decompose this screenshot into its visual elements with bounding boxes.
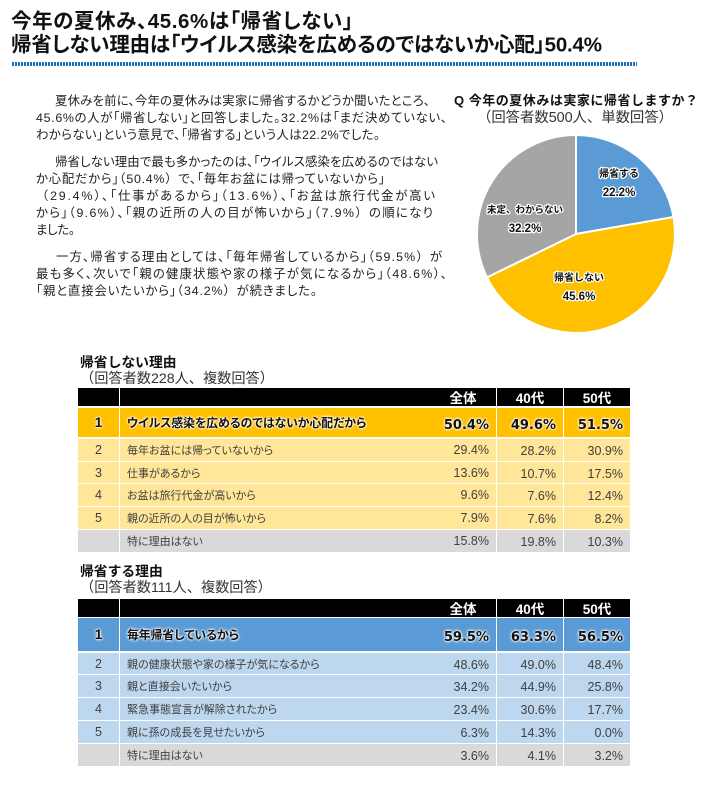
pie chart: 未定、わからない: [487, 204, 563, 216]
pie chart heading: [454, 93, 698, 126]
table: reasons returning: 48.6%: [454, 658, 489, 672]
table: reasons not returning: 5: [95, 511, 102, 525]
table: reasons not returning: 12.4%: [588, 489, 623, 503]
table heading: reasons not returning: （回答者数228人、複数回答）: [80, 371, 274, 387]
table: reasons not returning: 29.4%: [454, 443, 489, 457]
table: reasons not returning: 全体: [450, 391, 476, 406]
table: reasons returning: 44.9%: [521, 680, 556, 694]
text block: summary: ました。: [36, 223, 75, 237]
table: reasons not returning: 15.8%: [454, 534, 489, 548]
table: reasons returning: 30.6%: [521, 703, 556, 717]
table: reasons not returning: 10.7%: [521, 466, 556, 480]
pie chart: 22.2%: [603, 187, 635, 199]
table: reasons not returning: 7.6%: [528, 489, 556, 503]
text block: summary: 帰省しない理由で最も多かったのは、「ウイルス感染を広めるのではない: [55, 154, 438, 169]
table: reasons returning: 50代: [583, 602, 611, 617]
table: reasons returning: 毎年帰省しているから: [127, 628, 239, 642]
text block: summary: （29.4%）、「仕事があるから」（13.6%）、「お盆は旅行代金が高い: [36, 188, 435, 203]
table: reasons not returning: 特に理由はない: [127, 536, 203, 548]
table: reasons not returning: 2: [95, 443, 102, 457]
table: reasons returning: [78, 599, 630, 766]
table: reasons not returning: 13.6%: [454, 466, 489, 480]
pie chart: 32.2%: [509, 223, 541, 235]
table: reasons not returning: ウイルス感染を広めるのではないか心配だから: [127, 416, 366, 430]
table: reasons returning: 5: [95, 725, 102, 739]
pie chart heading: Q 今年の夏休みは実家に帰省しますか？: [454, 93, 698, 108]
table: reasons returning: 56.5%: [578, 630, 623, 644]
table: reasons returning: 緊急事態宣言が解除されたから: [127, 704, 277, 716]
text block: summary: わからない」という意見で、「帰省する」という人は22.2%でした。: [36, 127, 380, 142]
table: reasons returning: 59.5%: [444, 630, 489, 644]
table heading: reasons not returning: [80, 355, 274, 387]
table: reasons returning: 1: [95, 627, 102, 642]
text block: summary: から」（9.6%）、「親の近所の人の目が怖いから」（7.9%）の順になり: [36, 205, 433, 220]
text block: summary: [36, 93, 447, 298]
text block: summary: 「親と直接会いたいから」（34.2%）が続きました。: [36, 283, 317, 298]
table: reasons returning: 48.4%: [588, 658, 623, 672]
pie chart heading: （回答者数500人、単数回答）: [477, 109, 673, 126]
table: reasons not returning: 7.6%: [528, 512, 556, 526]
table: reasons returning: 49.0%: [521, 658, 556, 672]
text block: summary: 45.6%の人が「帰省しない」と回答しました。32.2%は「まだ決めていない、: [36, 110, 447, 125]
table: reasons not returning: 17.5%: [588, 466, 623, 480]
table: reasons not returning: 親の近所の人の目が怖いから: [127, 513, 266, 525]
table: reasons not returning: 40代: [516, 391, 544, 406]
table: reasons not returning: 30.9%: [588, 444, 623, 458]
table: reasons not returning: 9.6%: [460, 488, 489, 502]
table: reasons returning: 3: [95, 679, 102, 693]
table: reasons returning: 全体: [450, 602, 476, 617]
table: reasons returning: 4: [95, 702, 102, 716]
table: reasons not returning: 28.2%: [521, 444, 556, 458]
pie chart: 45.6%: [563, 291, 595, 303]
table: reasons returning: 親と直接会いたいから: [127, 681, 232, 693]
table: reasons returning: 0.0%: [594, 726, 623, 740]
table: reasons not returning: 10.3%: [588, 535, 623, 549]
table heading: reasons returning: （回答者数111人、複数回答）: [80, 580, 272, 596]
table: reasons returning: 14.3%: [521, 726, 556, 740]
table: reasons not returning: 50代: [583, 391, 611, 406]
pie chart: 帰省する: [599, 167, 639, 180]
table heading: reasons not returning: 帰省しない理由: [80, 355, 177, 370]
table: reasons returning: 6.3%: [460, 726, 489, 740]
table: reasons not returning: 仕事があるから: [127, 468, 200, 480]
table: reasons returning: 親に孫の成長を見せたいから: [127, 727, 265, 739]
text block: summary: 一方、帰省する理由としては、「毎年帰省しているから」（59.5%）が: [56, 249, 443, 264]
pie chart: 帰省しない: [554, 271, 604, 284]
table heading: reasons returning: [80, 564, 272, 596]
table: reasons not returning: 毎年お盆には帰っていないから: [127, 445, 273, 457]
table: reasons not returning: 8.2%: [594, 512, 623, 526]
table: reasons returning: 4.1%: [528, 749, 556, 763]
table: reasons returning: 63.3%: [511, 630, 556, 644]
table: reasons not returning: 1: [95, 415, 102, 430]
table: reasons returning: 23.4%: [454, 703, 489, 717]
table: reasons not returning: 51.5%: [578, 418, 623, 432]
table: reasons not returning: 7.9%: [460, 511, 489, 525]
table: reasons returning: 2: [95, 656, 102, 670]
table: reasons not returning: 3: [95, 466, 102, 480]
title: 帰省しない理由は「ウイルス感染を広めるのではないか心配」50.4%: [11, 32, 602, 56]
table: reasons not returning: [78, 388, 630, 552]
title: 今年の夏休み、45.6%は「帰省しない」: [11, 10, 353, 33]
pie chart: [478, 136, 674, 332]
table: reasons returning: 25.8%: [588, 680, 623, 694]
title underline: [12, 62, 637, 66]
table: reasons not returning: 4: [95, 488, 102, 502]
table: reasons returning: 特に理由はない: [127, 750, 203, 762]
table: reasons not returning: お盆は旅行代金が高いから: [127, 490, 256, 502]
text block: summary: 最も多く、次いで「親の健康状態や家の様子が気になるから」（48.6%）、: [36, 266, 447, 281]
table: reasons not returning: 49.6%: [511, 418, 556, 432]
table heading: reasons returning: 帰省する理由: [80, 564, 163, 579]
table: reasons returning: 34.2%: [454, 680, 489, 694]
table: reasons returning: 3.2%: [594, 749, 623, 763]
table: reasons not returning: 50.4%: [444, 418, 489, 432]
title: [11, 10, 602, 56]
text block: summary: 夏休みを前に、今年の夏休みは実家に帰省するかどうか聞いたところ、: [55, 93, 430, 108]
text block: summary: か心配だから」（50.4%）で、「毎年お盆には帰っていないから」: [36, 171, 385, 186]
table: reasons returning: 40代: [516, 602, 544, 617]
table: reasons returning: 親の健康状態や家の様子が気になるから: [127, 658, 320, 670]
table: reasons returning: 17.7%: [588, 703, 623, 717]
table: reasons returning: 3.6%: [460, 749, 489, 763]
table: reasons not returning: 19.8%: [521, 535, 556, 549]
